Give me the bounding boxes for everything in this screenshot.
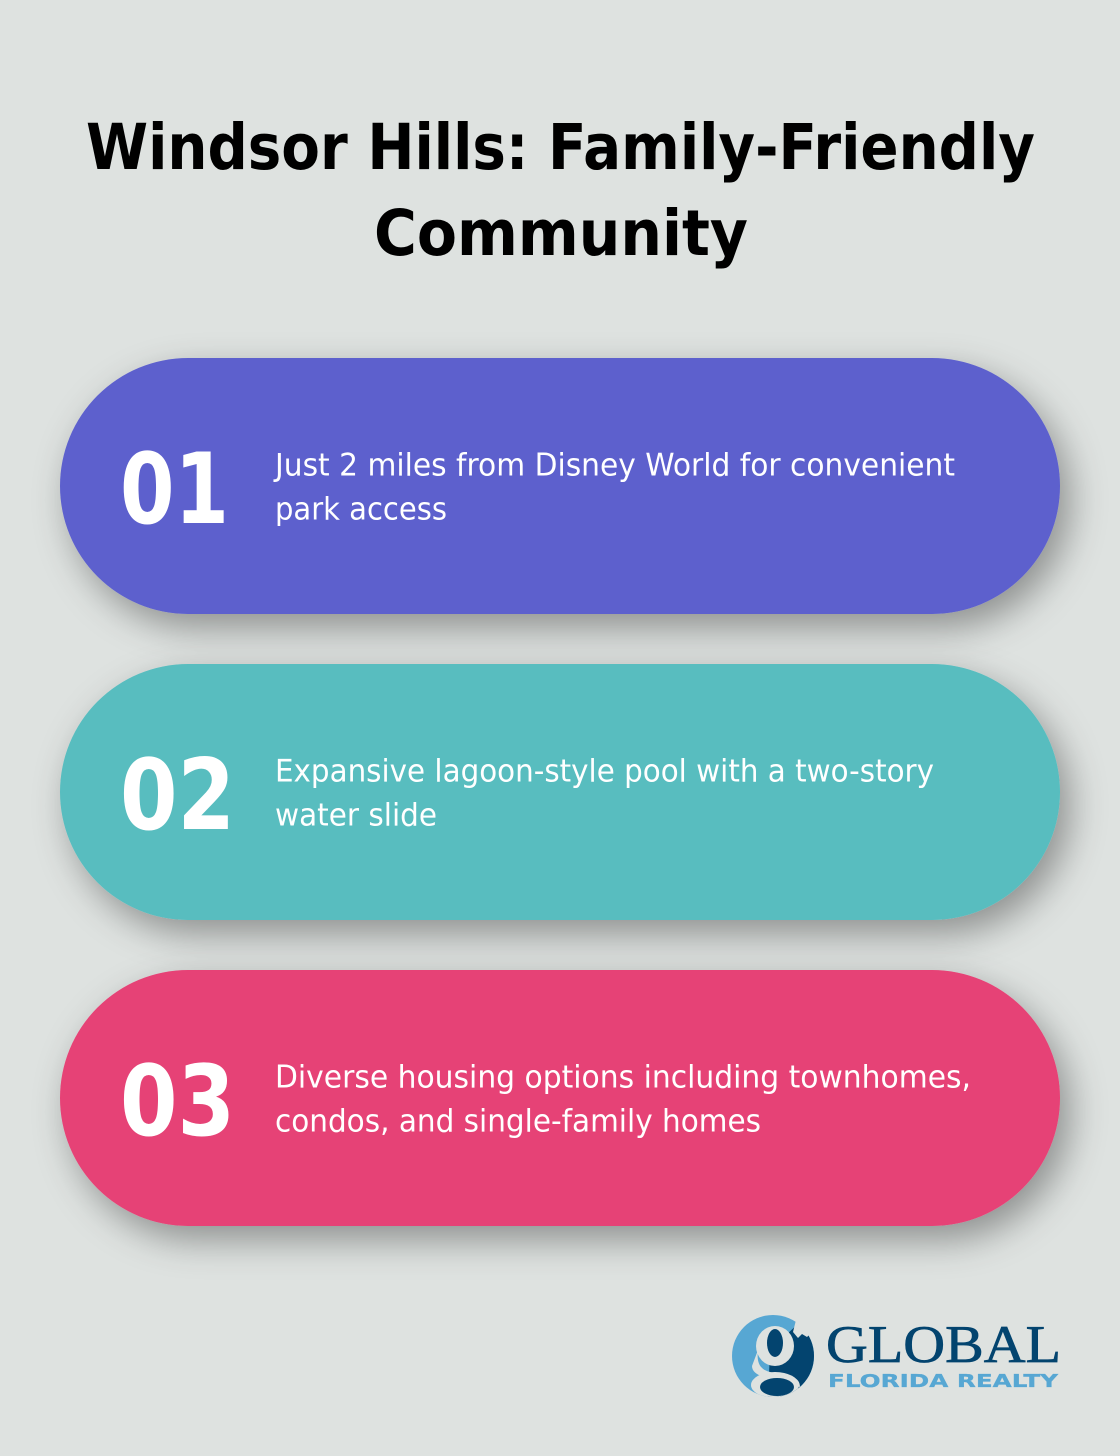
wordmark: GLOBAL: GLOBAL: [826, 1316, 1061, 1374]
number 03: 03: [120, 1045, 235, 1159]
title: Windsor Hills: Family-Friendly: [86, 111, 1035, 184]
number 01: 01: [120, 433, 229, 547]
icon: g roundel: [732, 1315, 814, 1397]
text: item 02 description: Expansive lagoon-style pool with a two-story: [275, 754, 934, 790]
title: [86, 111, 1035, 270]
logo: Global Florida Realty: [732, 1315, 1061, 1400]
text: item 02 description: [275, 754, 934, 834]
text: item 02 description: water slide: [275, 798, 437, 834]
number 02: 02: [120, 739, 235, 853]
text: item 03 description: [275, 1060, 971, 1140]
text: item 03 description: condos, and single-family homes: [275, 1104, 761, 1140]
text: item 01 description: Just 2 miles from Disney World for convenient: [273, 448, 955, 484]
panel: item 01: [60, 358, 1060, 614]
panel: item 02: [60, 664, 1060, 920]
text: item 01 description: park access: [275, 492, 447, 528]
text: item 03 description: Diverse housing options including townhomes,: [275, 1060, 971, 1096]
panel: item 03: [60, 970, 1060, 1226]
title: Community: [374, 197, 748, 270]
text: item 01 description: [273, 448, 955, 528]
wordmark: FLORIDA REALTY: FLORIDA REALTY: [828, 1371, 1059, 1392]
